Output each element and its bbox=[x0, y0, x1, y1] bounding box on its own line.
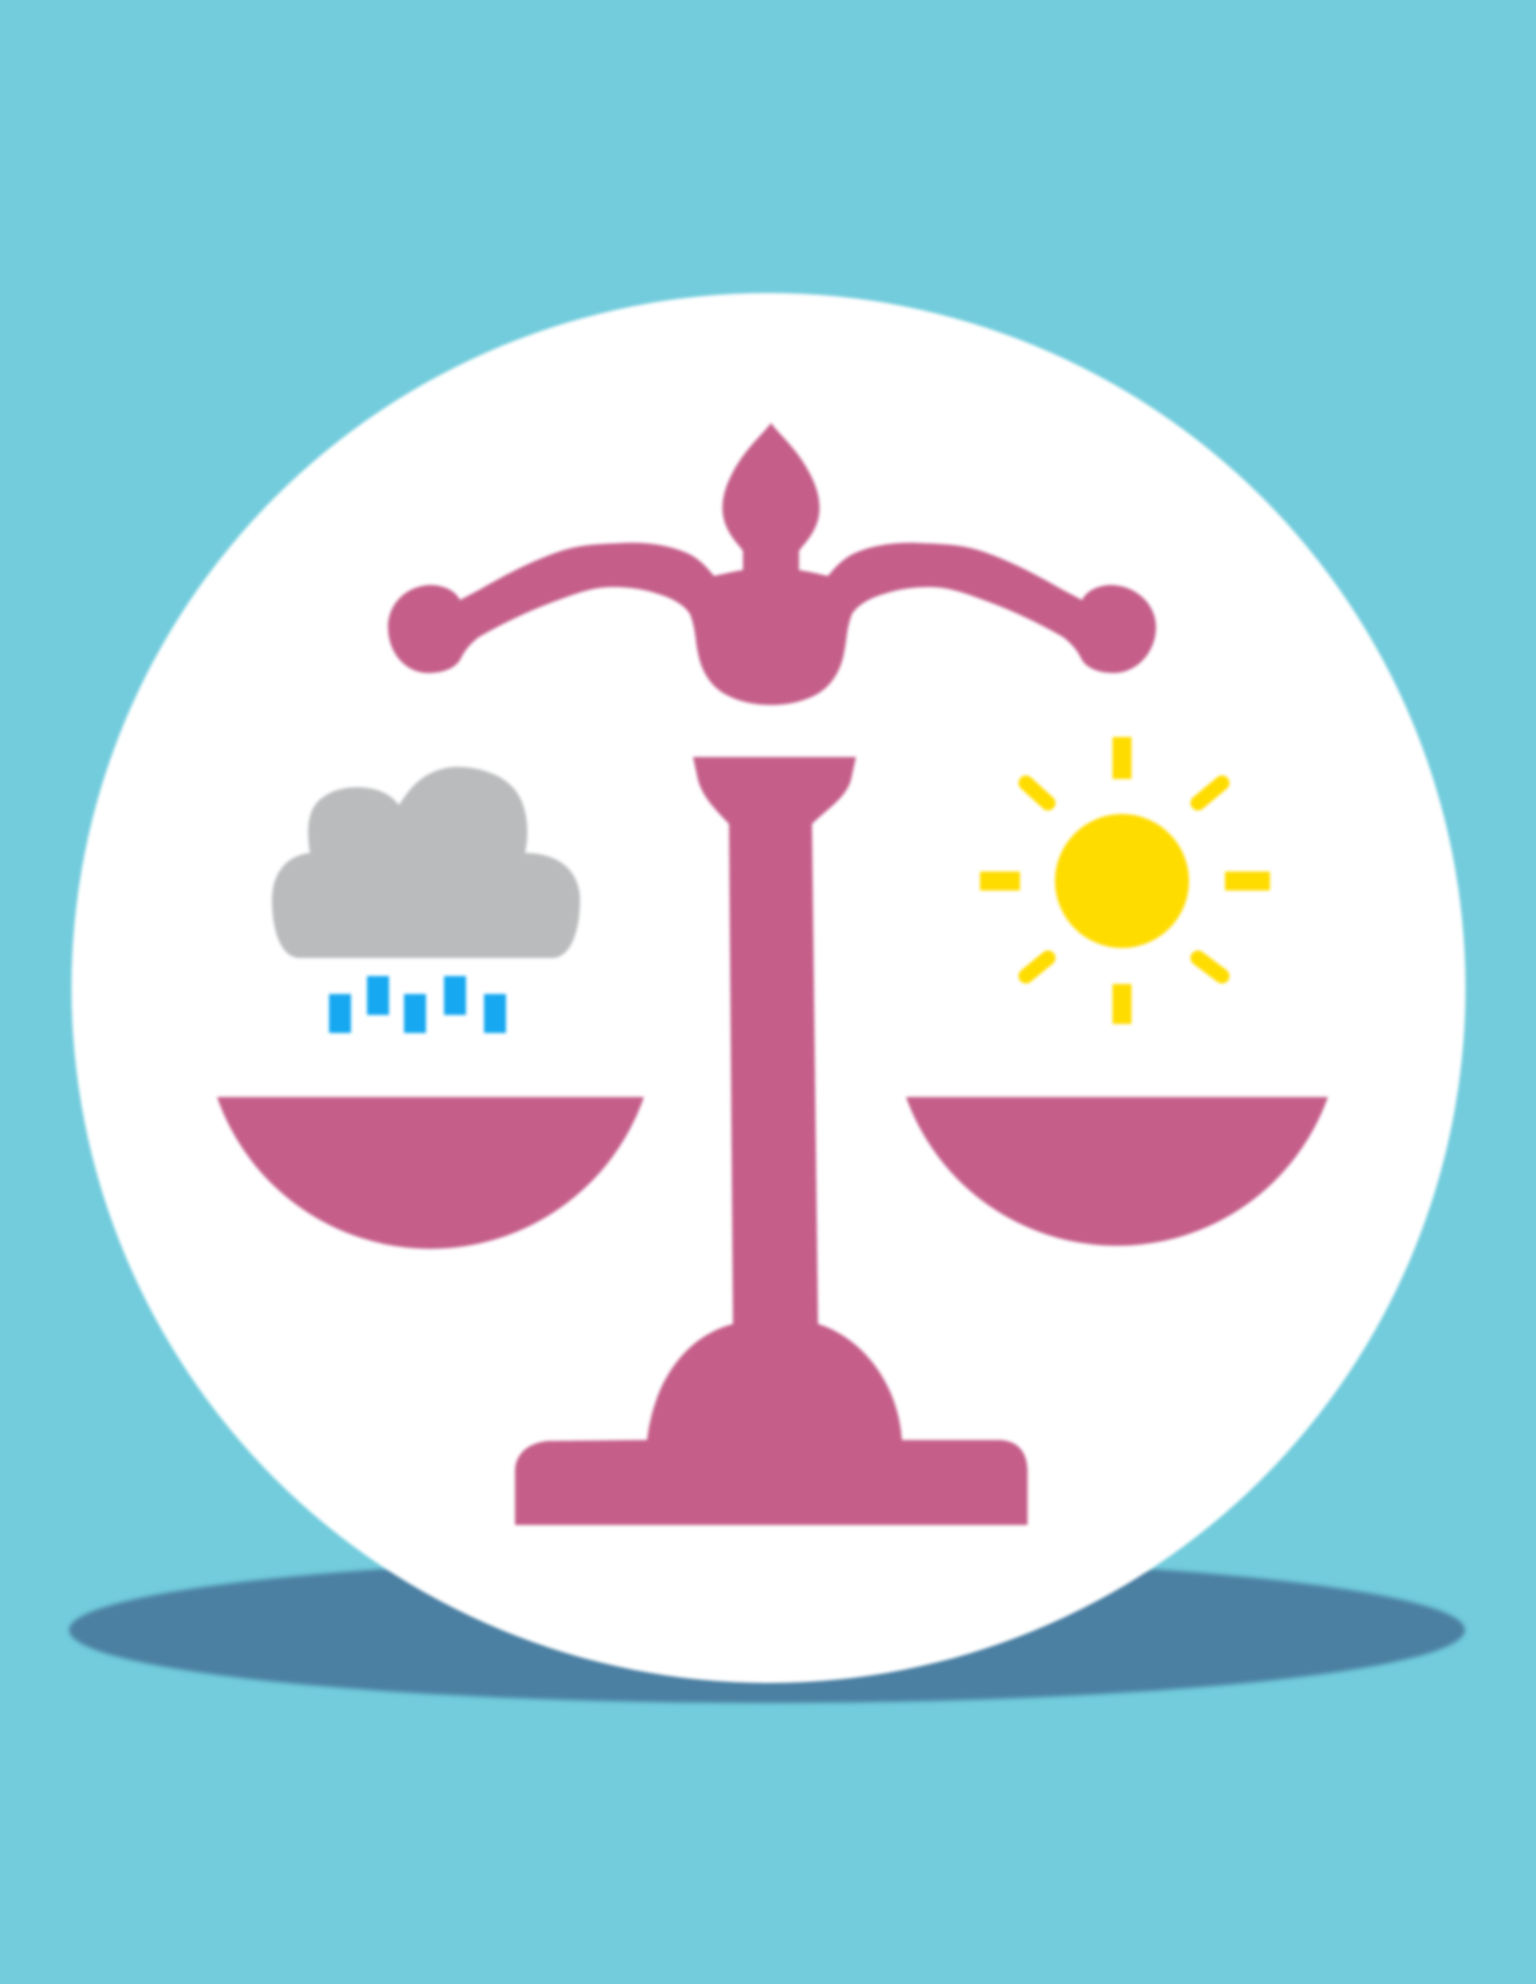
scale beam with finial bbox=[388, 423, 1156, 705]
icon: balance scale bbox=[217, 423, 1328, 1525]
white circle bbox=[72, 293, 1466, 1683]
ground shadow bbox=[69, 1557, 1465, 1703]
right pan bbox=[906, 1097, 1328, 1246]
sun rays bbox=[980, 737, 1270, 1024]
sun disc bbox=[1055, 814, 1189, 948]
raindrops bbox=[329, 976, 506, 1033]
scale column and base bbox=[515, 757, 1028, 1525]
icon: rain cloud bbox=[272, 767, 580, 1033]
icon: sun bbox=[980, 737, 1270, 1024]
cloud bbox=[272, 767, 580, 958]
left pan bbox=[217, 1097, 644, 1249]
